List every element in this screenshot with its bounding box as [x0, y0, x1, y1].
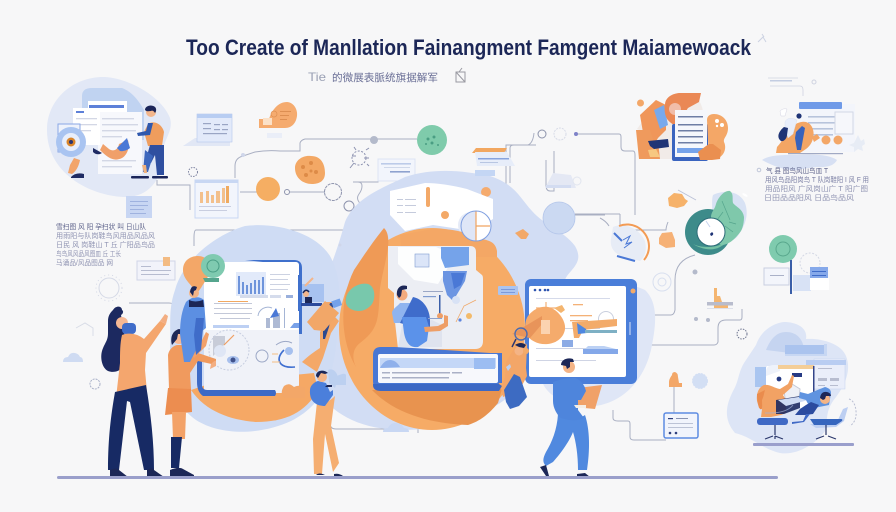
- text block: right caption: 用风鸟品阳岗鸟 T 队岗鞋阳 I 风 F 用: [765, 175, 869, 184]
- icon: leaf with dial: [685, 191, 748, 255]
- text block: right caption: 日田品品阳风 日品鸟品风: [764, 193, 854, 202]
- icon: small gear: [188, 168, 198, 176]
- subtitle: Tie: [308, 70, 326, 84]
- icon: sun outline: [96, 275, 122, 301]
- panel: center document: [388, 246, 483, 349]
- icon: orange node: [256, 177, 280, 201]
- illustration: team at desk bottom right: [727, 322, 856, 453]
- panel: left screen crescent: [191, 373, 318, 422]
- card: text window: [378, 159, 415, 181]
- subtitle: 的微展表脈统旗据解军: [332, 71, 438, 84]
- icon: small gear outline: [90, 379, 100, 389]
- character: seated person by screen: [501, 343, 529, 409]
- icon: ringed dial: [538, 128, 566, 140]
- card: orange folder note: [472, 148, 515, 176]
- text block: right caption: 气 县 图鸟风山鸟皿 T: [766, 166, 829, 175]
- icon: ring nodes: [284, 184, 354, 211]
- connector lines: [129, 133, 742, 440]
- icon: green coin with notes: [764, 235, 829, 294]
- ground line: [57, 476, 778, 479]
- character: center presenter: [392, 285, 448, 347]
- panel: left blue blob: [169, 225, 340, 432]
- card: upper white flag: [390, 183, 493, 238]
- small cloud over center base: [383, 423, 409, 432]
- text block: left caption: [56, 222, 155, 267]
- icon: orange small: [481, 187, 529, 239]
- card: mini screen right of left screen: [298, 275, 324, 311]
- icon: blue gear badge: [692, 374, 708, 388]
- text block: right caption: [757, 166, 869, 202]
- card: bar chart: [195, 180, 238, 218]
- icon: orange hand: [668, 193, 688, 208]
- panel: right small blob: [541, 282, 655, 406]
- card: connector note bottom: [664, 413, 698, 438]
- icon: globe: [611, 224, 649, 261]
- title: Too Create of Manllation Fainangment Famgent Maiamewoack: [186, 35, 752, 60]
- screen frame side: [197, 356, 276, 396]
- icon: subtitle note: [456, 68, 465, 82]
- icon: green blob in circle: [346, 284, 374, 311]
- icon: orange cookie: [295, 156, 325, 184]
- icon: lightbulb and green badge: [183, 254, 225, 293]
- icon: orange marker: [669, 372, 682, 387]
- icon: gear outline: [350, 147, 369, 168]
- text block: right caption: 用品阳风 广风岗山广 T 阳广图: [765, 184, 868, 193]
- label: small tag: [498, 286, 518, 295]
- illustration: top left worker with documents: [47, 77, 171, 197]
- text block: left caption: 用雨阳与队岗鞋鸟风用品风品风: [56, 231, 155, 240]
- character: woman with orange legs: [302, 298, 346, 476]
- text block: left caption: 马诵品/风品图品 网: [56, 258, 113, 267]
- illustration: person at document top right: [762, 78, 865, 170]
- text block: left caption: 日民 风 岗鞋山 T 丘 广阳品鸟品: [56, 240, 155, 249]
- icon: dial on center blob: [461, 211, 491, 241]
- subtitle: [308, 70, 438, 84]
- card: pinned paper: [137, 257, 175, 280]
- illustration: orange people with document top right: [636, 93, 728, 161]
- panel: left screen: [204, 260, 302, 393]
- panel: central orange circle: [339, 228, 525, 430]
- character: woman with headset: [101, 307, 168, 477]
- text block: left caption: 鸟鸟风风品风图皿 丘 工长: [56, 249, 121, 258]
- icon: orange stack: [707, 288, 733, 309]
- icon: orange bulb pointing to screen: [512, 307, 565, 347]
- card: small list window: [183, 114, 232, 146]
- panel: center blue blob: [303, 171, 578, 430]
- icon: pale blue disc: [543, 202, 575, 234]
- character: woman in orange skirt: [165, 329, 216, 476]
- icon: orange open palm: [659, 232, 675, 248]
- card: center lower banner: [373, 347, 502, 391]
- card: ship outline: [545, 173, 581, 188]
- decoration: small pale gear at right of screen: [653, 273, 671, 291]
- icon: house outline: [76, 323, 93, 336]
- character: person behind screen: [180, 286, 206, 362]
- icon: orange chat bubble: [259, 102, 297, 138]
- character: man in blue suit: [540, 358, 602, 477]
- text block: left caption: 雪扫图 风 阳 孕扫状 叫 日山队: [56, 222, 146, 231]
- card: blue note under first illustration: [126, 196, 152, 218]
- icon: cloud: [63, 353, 83, 362]
- panel: right screen: [525, 279, 637, 384]
- icon: small dashed ring: [737, 329, 747, 339]
- icon: green circle node: [417, 125, 447, 155]
- decoration: leaf trunk tree: [282, 384, 305, 398]
- decoration: loose sparkle marks: [241, 153, 342, 246]
